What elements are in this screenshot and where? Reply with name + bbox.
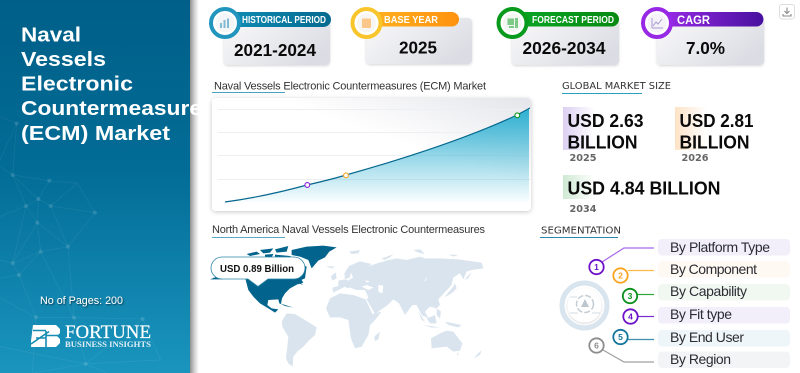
panel: area chart [212, 98, 532, 211]
heading: global market size: GLOBAL MARKET SIZE [562, 81, 671, 92]
North America highlight [210, 246, 337, 313]
stat: 2026 market size: USD 2.81 [680, 110, 754, 131]
segment 4: By Fit type [623, 306, 790, 324]
callout: USD 0.89 Billion [211, 257, 305, 286]
value: 2026-2034: 2026-2034 [522, 38, 606, 58]
stat: 2025 market size: BILLION [568, 132, 638, 152]
pill: base year: BASE YEAR [384, 15, 439, 26]
stat: 2025 market size [563, 107, 644, 164]
segment 1: By Platform Type [589, 239, 790, 274]
South America [282, 313, 317, 367]
icon: download [780, 4, 794, 19]
segment 6: By Region: By Region [670, 351, 731, 367]
segment 6: By Region [589, 338, 790, 368]
pill: CAGR: CAGR [677, 13, 710, 27]
stat: 2034 market size: 2034 [570, 204, 597, 215]
card: forecast period [498, 9, 619, 65]
area under curve [225, 108, 529, 202]
title [21, 24, 202, 145]
growth line [225, 108, 530, 202]
segment 3: By Capability [623, 283, 790, 303]
segment 5: By End User [613, 329, 790, 346]
stat: 2026 market size: BILLION [680, 132, 750, 152]
heading: market chart: Naval Vessels Electronic Countermeasures (ECM) Market [214, 80, 486, 92]
title: Electronic [21, 72, 133, 96]
title: Vessels [21, 48, 106, 71]
icon: growth badge [643, 9, 671, 37]
stat: 2034 market size: USD 4.84 BILLION [568, 178, 720, 198]
segment 2: By Component [613, 261, 790, 283]
stat: 2026 market size [675, 107, 754, 164]
stat: 2025 market size: USD 2.63 [568, 110, 644, 131]
title: Countermeasure [21, 97, 202, 120]
segment 1: By Platform Type: 1 [594, 262, 599, 272]
value: 2025: 2025 [399, 38, 437, 58]
segment 3: By Capability: 3 [628, 291, 633, 301]
icon: forecast badge [498, 9, 526, 37]
page count: No of Pages: 200 [40, 295, 123, 307]
marker: 2034 [515, 113, 520, 118]
segment 4: By Fit type: 4 [628, 312, 633, 322]
segment 2: By Component: 2 [618, 270, 623, 280]
segment 2: By Component: By Component [670, 261, 757, 277]
segment 6: By Region: 6 [594, 340, 599, 350]
stat: 2034 market size [563, 175, 720, 215]
heading: regional map: North America Naval Vessels Electronic Countermeasures [212, 224, 486, 236]
Europe Asia Africa Oceania [326, 249, 483, 358]
segment 4: By Fit type: By Fit type [670, 306, 732, 322]
card: historical period [211, 9, 331, 65]
sidebar panel [0, 0, 199, 373]
segment 1: By Platform Type: By Platform Type [670, 239, 770, 255]
value: 2021-2024: 2021-2024 [234, 40, 316, 60]
logo: Fortune Business Insights [31, 322, 151, 349]
card: CAGR [643, 9, 764, 65]
marker: 2026 [344, 173, 348, 178]
title: (ECM) Market [21, 122, 170, 145]
pill: historical period: HISTORICAL PERIOD [242, 15, 326, 26]
stat: 2026 market size: 2026 [682, 153, 709, 164]
icon: calendar badge [352, 9, 380, 37]
logo: Fortune Business Insights: FORTUNE [65, 322, 151, 343]
segment 5: By End User: 5 [618, 332, 623, 342]
heading: segmentation: SEGMENTATION [541, 226, 621, 236]
world map [210, 246, 483, 367]
stat: 2025 market size: 2025 [570, 153, 597, 164]
title: Naval [21, 24, 81, 46]
icon: segmentation hub [562, 283, 607, 328]
card: base year [352, 9, 472, 64]
segment 5: By End User: By End User [670, 329, 744, 345]
marker: 2025 [305, 183, 310, 187]
icon: bar chart badge [211, 9, 239, 37]
pill: forecast period: FORECAST PERIOD [532, 15, 614, 26]
logo: Fortune Business Insights: BUSINESS INSIGHTS [65, 339, 151, 349]
value: 7.0%: 7.0% [686, 38, 725, 58]
callout: USD 0.89 Billion: USD 0.89 Billion [220, 264, 294, 275]
segment 3: By Capability: By Capability [670, 283, 747, 299]
Americas [210, 246, 337, 367]
